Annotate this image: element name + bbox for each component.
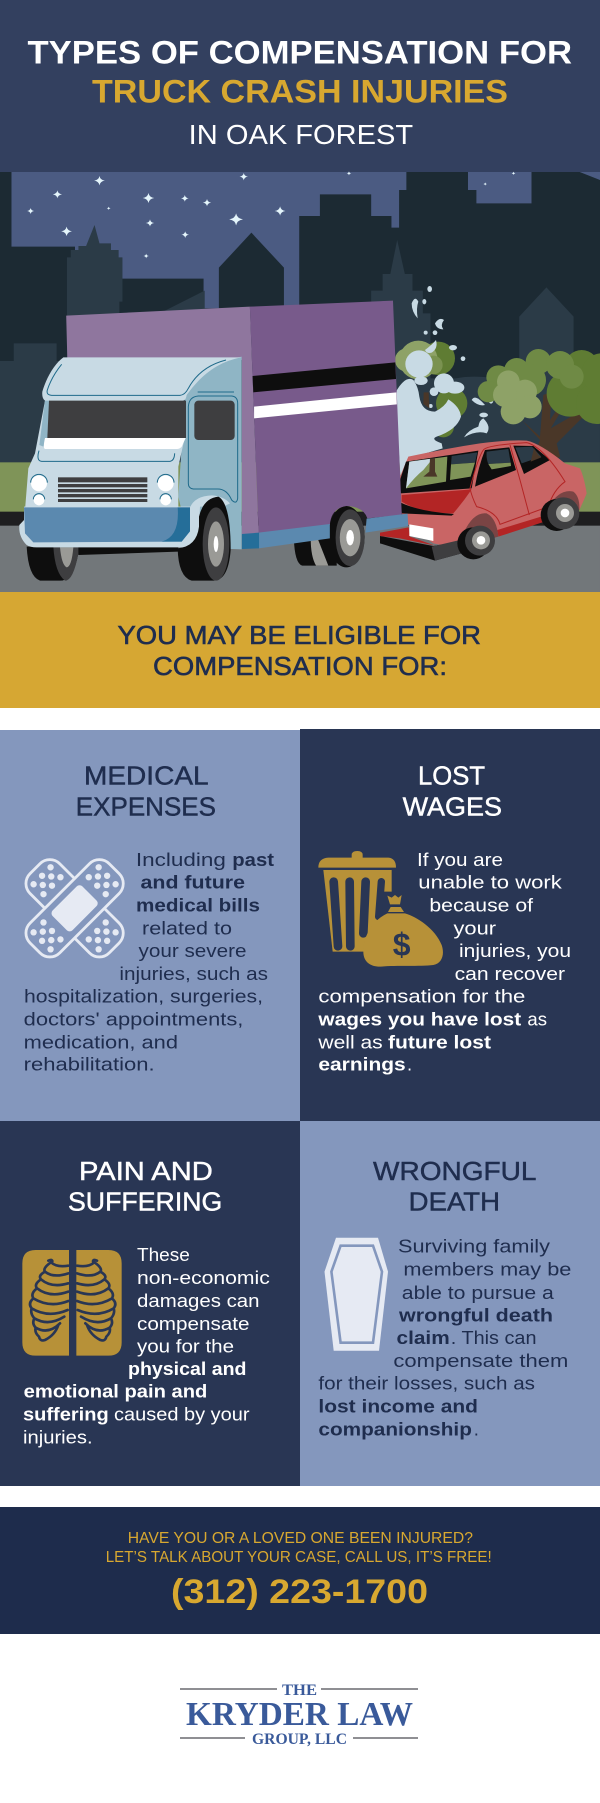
heading: lost wages: LOST: [418, 760, 485, 790]
phone number: (312) 223-1700: [171, 1573, 428, 1611]
text: medical expenses body: rehabilitation.: [24, 1054, 155, 1075]
heading: pain and suffering: PAIN AND: [79, 1156, 213, 1186]
text: pain and suffering body: [23, 1244, 270, 1448]
door window: [194, 401, 235, 440]
tree behind smoke: [395, 341, 467, 437]
text: wrongful death body: . This can: [451, 1327, 536, 1348]
panel: header: [0, 0, 600, 172]
text: pain and suffering body: you for the: [137, 1335, 234, 1356]
text: lost wages body: well as: [317, 1031, 383, 1052]
text: medical expenses body: hospitalization, surgeries,: [24, 986, 263, 1007]
car door lines: [470, 443, 565, 524]
banner line one: YOU MAY BE ELIGIBLE FOR: [118, 620, 481, 650]
mid-tone buildings: [0, 225, 600, 467]
icon: trash can and money bag: $: [393, 926, 411, 962]
text: pain and suffering body: compensate: [137, 1313, 250, 1334]
text: wrongful death body: members may be: [403, 1259, 571, 1280]
text: wrongful death body: wrongful death: [398, 1305, 553, 1326]
windshield: [47, 401, 186, 438]
illustration: night city truck crash scene: [0, 171, 600, 592]
car wheels: [463, 513, 498, 547]
text: pain and suffering body: caused by your: [114, 1404, 250, 1425]
heading: medical expenses: EXPENSES: [76, 792, 216, 822]
text: medical expenses body: medication, and: [24, 1031, 178, 1052]
smoke cloud: [395, 286, 493, 480]
truck box side: [66, 307, 259, 535]
title line three: IN OAK FOREST: [189, 119, 413, 150]
heading: lost wages: WAGES: [403, 792, 502, 822]
text: pain and suffering body: damages can: [137, 1290, 260, 1311]
text: lost wages body: .: [407, 1054, 412, 1075]
text: pain and suffering body: physical and: [128, 1358, 246, 1379]
title line two: TRUCK CRASH INJURIES: [92, 74, 508, 110]
truck front left wheel: [27, 547, 78, 581]
text: lost wages body: earnings: [318, 1054, 406, 1075]
cab front and roof: [25, 357, 242, 510]
text: lost wages body: can recover: [455, 963, 565, 984]
visor strip: [44, 438, 186, 449]
panel: medical expenses: [0, 730, 300, 1121]
car side windows: [475, 447, 516, 487]
truck rear wheels: [294, 538, 337, 566]
text: wrongful death body: Surviving family: [398, 1236, 551, 1257]
text: medical expenses body: injuries, such as: [119, 963, 268, 984]
windshield frame: [39, 401, 49, 447]
text: lost wages body: wages you have lost: [317, 1009, 521, 1030]
text: wrongful death body: claim: [396, 1327, 450, 1348]
heading: medical expenses: MEDICAL: [84, 760, 209, 790]
panel: pain and suffering: [0, 1121, 300, 1486]
text: medical expenses body: past: [232, 849, 274, 870]
panel: call to action footer: [0, 1507, 600, 1634]
cab trim lines: [38, 360, 238, 502]
tree trunk fragment in smoke: [423, 392, 429, 408]
title line one: TYPES OF COMPENSATION FOR: [28, 34, 572, 70]
text: lost wages body: your: [454, 918, 496, 939]
icon: crossed bandages: [20, 854, 129, 963]
call to action line one: HAVE YOU OR A LOVED ONE BEEN INJURED?: [128, 1530, 473, 1547]
text: wrongful death body: able to pursue a: [402, 1282, 555, 1303]
car front underside: [380, 536, 462, 561]
text: medical expenses body: doctors' appointments,: [24, 1009, 243, 1030]
text: pain and suffering body: injuries.: [23, 1427, 93, 1448]
icon: trash can and money bag: [318, 851, 443, 967]
heading: pain and suffering: [68, 1156, 222, 1217]
text: medical expenses body: Including: [136, 849, 226, 870]
text: pain and suffering body: These: [137, 1244, 190, 1265]
crumpled hood: [402, 489, 472, 513]
text: medical expenses body: medical bills: [136, 895, 260, 916]
car headlight: [409, 524, 433, 541]
text: pain and suffering body: suffering: [23, 1404, 109, 1425]
cab side: [178, 357, 242, 549]
truck under chassis: [78, 547, 178, 555]
truck front right wheel: [178, 495, 231, 581]
front bumper: [19, 507, 199, 547]
icon: rib cage: [22, 1250, 122, 1356]
logo: The Kryder Law Group, LLC: KRYDER LAW: [186, 1696, 413, 1733]
text: wrongful death body: for their losses, such as: [318, 1373, 535, 1394]
heading: wrongful death: WRONGFUL: [373, 1156, 536, 1186]
text: lost wages body: If you are: [417, 849, 503, 870]
text: pain and suffering body: emotional pain and: [24, 1381, 207, 1402]
car body: [400, 440, 587, 548]
panel: eligibility banner: [0, 592, 600, 708]
headlights: [31, 474, 174, 505]
panel: lost wages: [300, 729, 600, 1121]
logo: The Kryder Law Group, LLC: THE: [282, 1682, 317, 1699]
text: lost wages body: injuries, you: [459, 940, 571, 961]
text: pain and suffering body: non-economic: [137, 1267, 270, 1288]
text: lost wages body: because of: [429, 895, 534, 916]
grass and road: [0, 462, 600, 592]
panel: wrongful death: [300, 1121, 600, 1486]
text: medical expenses body: related to: [142, 918, 232, 939]
text: wrongful death body: compensate them: [393, 1350, 568, 1371]
grille: [58, 477, 147, 502]
text: medical expenses body: and future: [140, 872, 245, 893]
dark city skyline: [0, 172, 600, 467]
text: medical expenses body: [24, 849, 274, 1075]
call to action line two: LET’S TALK ABOUT YOUR CASE, CALL US, IT’S FREE!: [106, 1549, 492, 1566]
right tree: [478, 349, 600, 463]
heading: medical expenses: [76, 760, 216, 822]
text: wrongful death body: [318, 1236, 571, 1439]
logo: The Kryder Law Group, LLC: GROUP, LLC: [252, 1731, 347, 1748]
truck blue skirt: [259, 524, 330, 548]
icon: coffin: [324, 1238, 388, 1351]
text: medical expenses body: your severe: [138, 940, 246, 961]
text: wrongful death body: lost income and: [318, 1396, 478, 1417]
car sill: [497, 513, 552, 537]
car windshield: [400, 451, 478, 493]
text: lost wages body: [317, 849, 571, 1075]
heading: pain and suffering: SUFFERING: [68, 1187, 222, 1217]
heading: lost wages: [403, 760, 502, 822]
heading: wrongful death: DEATH: [409, 1187, 500, 1217]
text: lost wages body: future lost: [388, 1031, 491, 1052]
logo: The Kryder Law Group, LLC: [180, 1682, 418, 1748]
truck black stripe: [253, 362, 396, 392]
night sky stars: [27, 171, 515, 258]
text: wrongful death body: .: [474, 1418, 479, 1439]
truck box rear face: [250, 301, 402, 533]
text: lost wages body: as: [527, 1009, 547, 1030]
text: wrongful death body: companionship: [318, 1418, 472, 1439]
truck white stripe: [254, 392, 397, 418]
heading: wrongful death: [373, 1156, 536, 1217]
red car: [380, 440, 587, 561]
banner line two: COMPENSATION FOR:: [153, 651, 447, 681]
truck cab: [19, 357, 242, 581]
text: lost wages body: compensation for the: [318, 986, 525, 1007]
text: lost wages body: unable to work: [418, 872, 563, 893]
